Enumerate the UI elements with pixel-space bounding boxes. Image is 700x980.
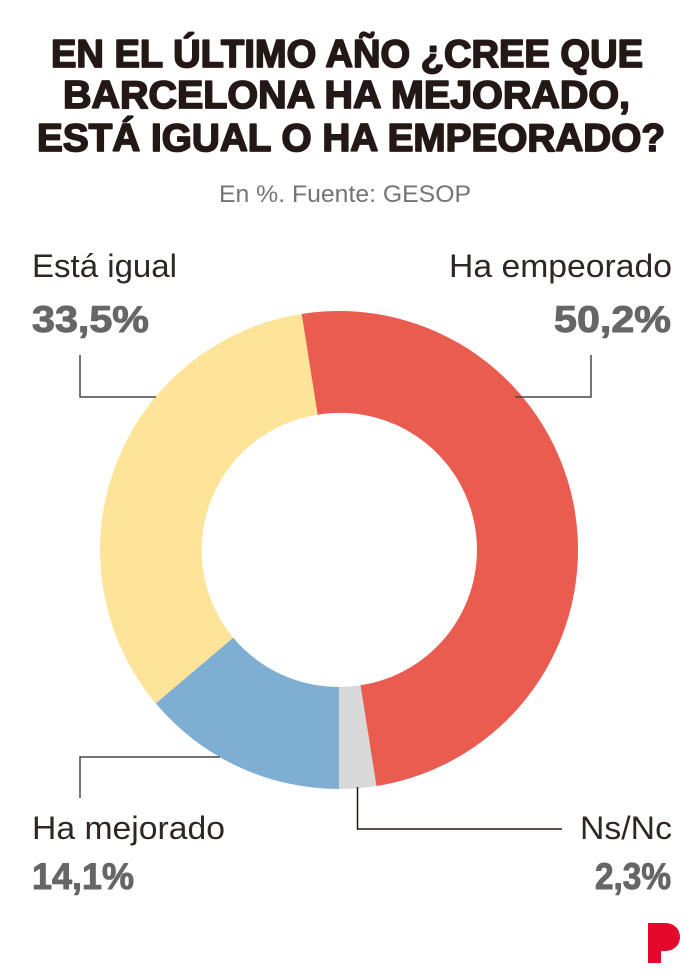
callout: Ha empeorado: Ha empeorado xyxy=(449,248,672,284)
callout: Ha empeorado xyxy=(449,248,672,397)
title xyxy=(37,32,665,160)
title: EN EL ÚLTIMO AÑO ¿CREE QUE xyxy=(51,32,643,76)
segment: Ha mejorado 14,1% xyxy=(156,638,339,789)
donut chart xyxy=(100,311,578,789)
subtitle: source: En %. Fuente: GESOP xyxy=(219,181,471,208)
callout: Está igual: Está igual xyxy=(32,248,177,284)
title: BARCELONA HA MEJORADO, xyxy=(63,74,630,117)
callout: Ha mejorado: 14,1% xyxy=(32,855,134,897)
segment: Ns/Nc 2,3% xyxy=(339,685,376,789)
segment: Está igual 33,5% xyxy=(100,314,318,703)
title: ESTÁ IGUAL O HA EMPEORADO? xyxy=(37,116,665,160)
callout: Ha empeorado: 50,2% xyxy=(554,298,671,340)
callout: Está igual xyxy=(32,248,177,397)
callout: Ha mejorado: Ha mejorado xyxy=(32,810,225,846)
callout: Está igual: 33,5% xyxy=(32,298,149,340)
callout: Ns/Nc: Ns/Nc xyxy=(580,810,672,846)
callout: Ns/Nc: 2,3% xyxy=(595,855,671,897)
segment: Ha empeorado 50,2% xyxy=(302,311,578,786)
icon: brand logo P xyxy=(648,923,680,963)
callout: Ns/Nc xyxy=(358,787,672,897)
callout: Ha mejorado xyxy=(32,757,225,897)
